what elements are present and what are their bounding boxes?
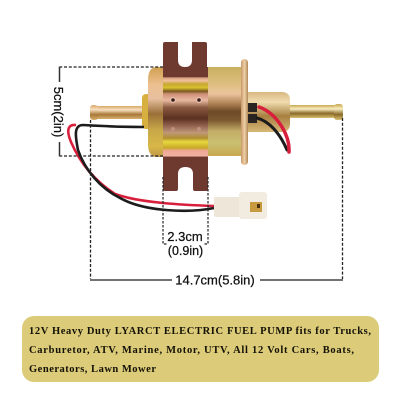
right wires [248, 103, 289, 152]
flange [241, 59, 248, 165]
fuel pump photo [68, 42, 343, 219]
bottom mounting bracket [163, 156, 208, 191]
right tube [290, 104, 343, 120]
dimension: length 14.7cm: 14.7cm(5.8in) [175, 272, 255, 288]
dimension: slot 2.3cm: (0.9in) [168, 244, 203, 258]
description text: 12V Heavy Duty LYARCT ELECTRIC FUEL PUMP fits for Trucks, [29, 326, 371, 337]
right housing [247, 92, 290, 132]
dimension: length 14.7cm [90, 118, 343, 288]
dimension: slot 2.3cm [163, 177, 208, 258]
dimension: height 5cm: 5cm(2in) [51, 87, 66, 137]
left wires and harness [68, 125, 214, 211]
dimension: height 5cm [51, 66, 163, 156]
description text: Carburetor, ATV, Marine, Motor, UTV, All 12 Volt Cars, Boats, [29, 345, 354, 356]
connector plug [214, 192, 267, 219]
left tube [90, 105, 146, 120]
top mounting bracket [163, 42, 207, 68]
pump body [163, 67, 242, 157]
description text: Generators, Lawn Mower [29, 364, 156, 375]
description panel [22, 316, 379, 382]
description text [29, 326, 371, 375]
left end cap [142, 67, 163, 157]
dimension: slot 2.3cm: 2.3cm [167, 229, 203, 244]
